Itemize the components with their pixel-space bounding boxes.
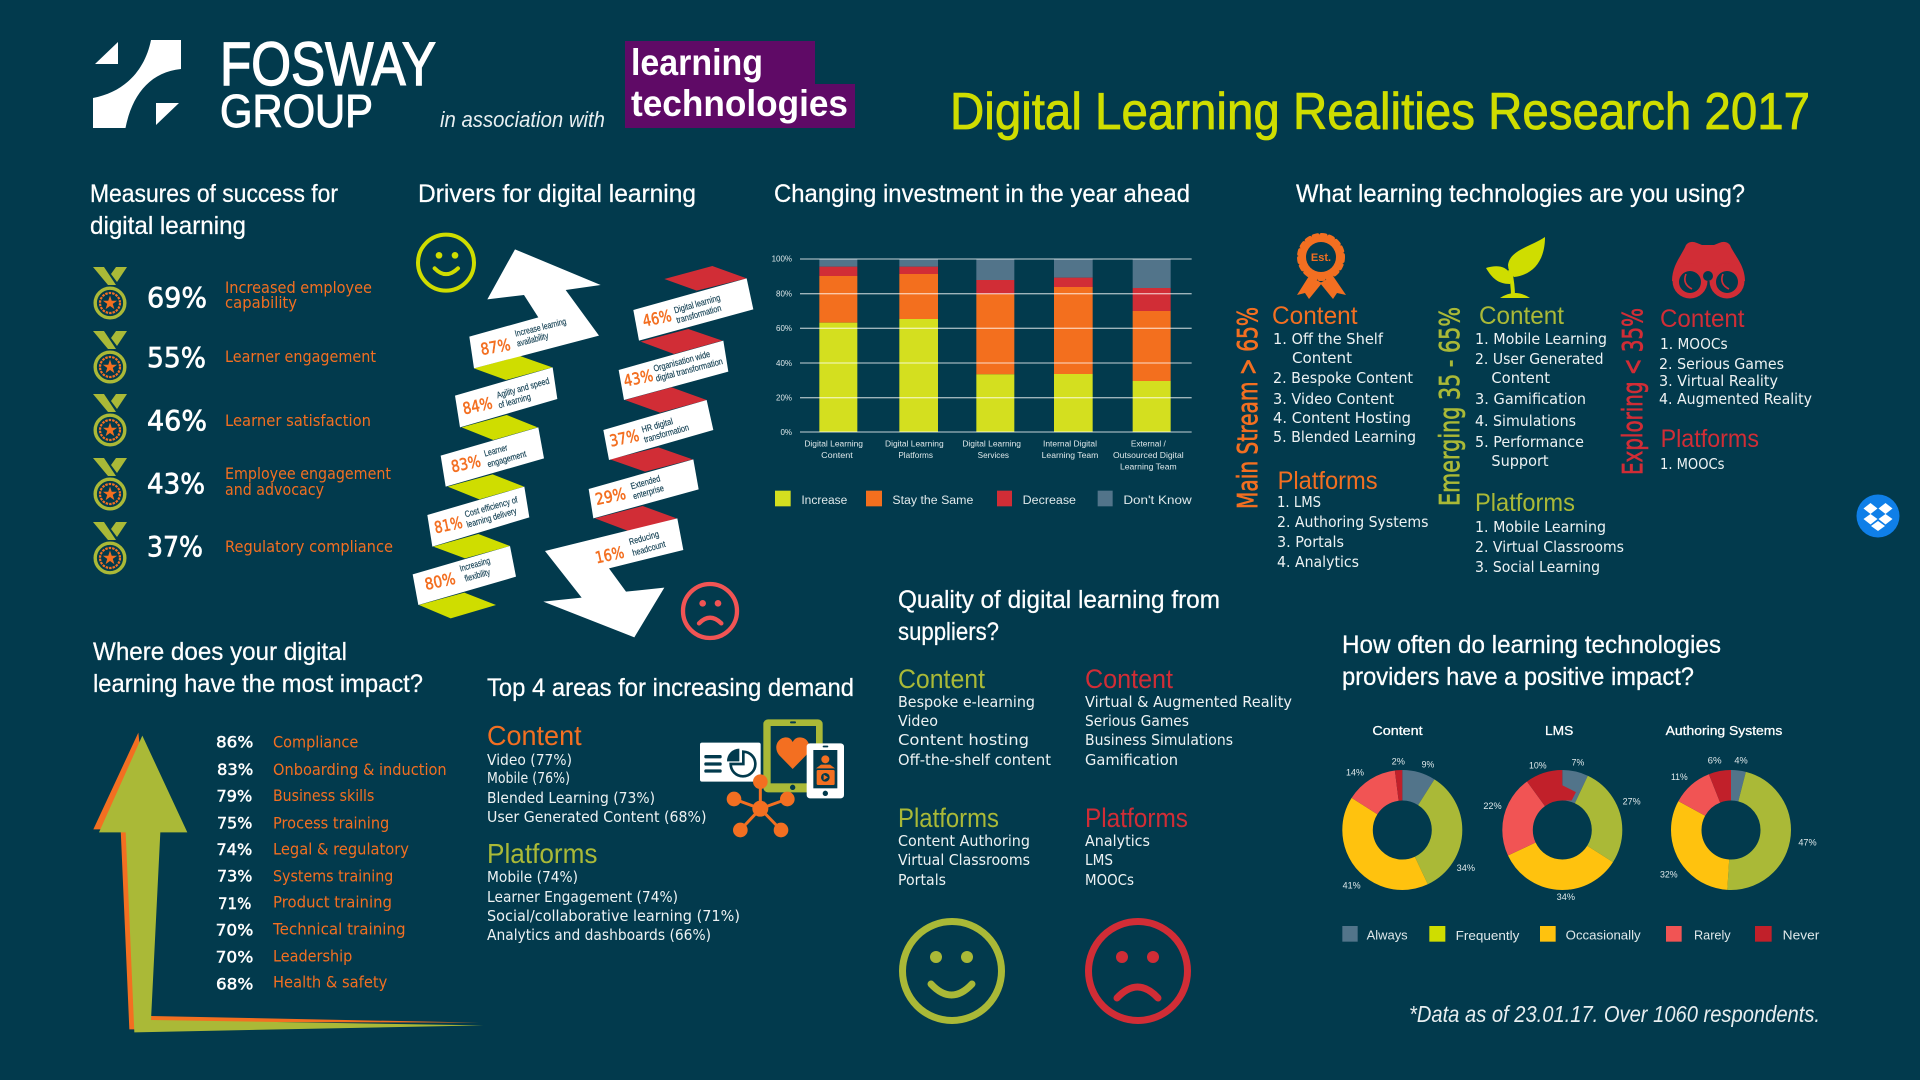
ribbon: positive drivers: 83%	[449, 451, 483, 476]
list: good content: Content hosting	[898, 731, 1029, 749]
list: poor platforms: MOOCs	[1085, 871, 1134, 889]
heading: impact	[93, 638, 423, 698]
legend: donuts: Never	[1783, 927, 1820, 942]
measure: 55%: 55%	[147, 341, 206, 374]
list: impact percentages: 75%	[217, 813, 252, 832]
category labels: Digital Learning	[804, 439, 863, 449]
icon: binoculars	[1672, 242, 1745, 298]
ribbon: positive drivers: Increase learning	[514, 316, 567, 339]
list: impact percentages: 70%	[216, 921, 253, 940]
measure: 43%: 43%	[147, 467, 205, 500]
heading: investment: Changing investment in the year ahead	[774, 180, 1190, 208]
list: demand platforms: Social/collaborative learning (71%)	[487, 907, 740, 925]
list: impact percentages: 79%	[216, 787, 252, 806]
bars	[800, 259, 1192, 432]
list: impact labels: Legal & regulatory	[273, 839, 409, 858]
list: exploring content: 1. MOOCs	[1660, 335, 1728, 353]
donut titles and values: 7%	[1572, 757, 1584, 767]
measure: 69%: capability	[225, 293, 297, 312]
list: emerging platforms	[1475, 489, 1624, 576]
ribbon: negative drivers: 43%	[622, 366, 655, 391]
donut titles and values: 32%	[1660, 870, 1678, 880]
donut titles and values: 14%	[1346, 768, 1364, 778]
donut titles and values: Content	[1372, 724, 1423, 738]
list: demand platforms: Analytics and dashboards (66%)	[487, 926, 711, 944]
list: demand content: User Generated Content (68%)	[487, 808, 706, 826]
ribbon: positive drivers: engagement	[486, 449, 528, 469]
vertical label: emerging: Emerging 35 - 65%	[1433, 307, 1466, 506]
list: impact labels: Onboarding & induction	[273, 760, 447, 779]
measure: 55%: Learner engagement	[225, 347, 376, 366]
category labels: Content	[821, 450, 854, 460]
logo: Fosway Group: FOSWAY	[220, 30, 436, 98]
list: main stream platforms: Platforms	[1278, 467, 1378, 495]
chart: stacked bars investment	[772, 255, 1192, 507]
list: good platforms: Platforms	[898, 803, 999, 833]
panel: measures of success	[90, 180, 393, 573]
measure: 46%	[93, 394, 371, 445]
donut titles and values: 22%	[1483, 801, 1502, 811]
measure: 43%: Employee engagement	[225, 464, 391, 483]
ribbon: positive drivers	[413, 249, 601, 618]
legend: donuts: Frequently	[1456, 928, 1520, 943]
measure: 37%: 37%	[147, 530, 203, 563]
axis labels: 100%	[772, 255, 792, 264]
ribbon: negative drivers: Reducing	[628, 529, 660, 547]
list: main stream content: 2. Bespoke Content	[1273, 369, 1413, 387]
ribbon: positive drivers: of learning	[497, 391, 532, 410]
ribbon: negative drivers: 16%	[594, 543, 626, 567]
list: poor platforms: Platforms	[1085, 803, 1188, 833]
category labels	[804, 439, 1184, 471]
list: emerging platforms: 2. Virtual Classrooms	[1475, 538, 1624, 556]
logo: Fosway Group	[93, 30, 436, 137]
list: main stream content	[1272, 302, 1416, 446]
donut titles and values: 34%	[1457, 863, 1475, 873]
donut titles and values: Authoring Systems	[1666, 724, 1782, 738]
heading: impact: Where does your digital	[93, 638, 347, 666]
heading: positive impact: providers have a positive impact?	[1342, 663, 1694, 691]
list: impact labels: Technical training	[272, 919, 406, 938]
measure: 37%: Regulatory compliance	[225, 537, 393, 556]
legend: donuts: Always	[1367, 927, 1408, 942]
list: poor platforms	[1085, 803, 1188, 889]
icon: rosette: Est.	[1311, 252, 1331, 264]
list: impact percentages: 74%	[216, 840, 252, 859]
measure: 55%	[93, 331, 376, 382]
category labels: Digital Learning	[885, 439, 944, 449]
list: good content: Content	[898, 664, 985, 694]
measure: 69%: 69%	[147, 281, 207, 314]
measure: 69%	[93, 267, 372, 318]
donut titles and values: 6%	[1708, 755, 1722, 765]
ribbon: negative drivers: transformation	[643, 422, 690, 445]
legend: donuts: Rarely	[1694, 927, 1731, 942]
list: impact percentages: 83%	[217, 760, 253, 779]
heading: quality	[898, 586, 1220, 646]
axis labels: 20%	[776, 394, 792, 403]
list: impact percentages: 73%	[217, 867, 252, 886]
list: exploring content: 4. Augmented Reality	[1659, 390, 1812, 408]
heading: positive impact	[1342, 631, 1721, 691]
heading: impact: learning have the most impact?	[93, 670, 423, 698]
heading: measures: Measures of success for	[90, 180, 338, 208]
list: good content: Video	[898, 712, 938, 730]
ribbon: negative drivers: transformation	[675, 303, 722, 325]
list: poor platforms: LMS	[1085, 851, 1113, 869]
heading: technologies: What learning technologies are you using?	[1296, 180, 1745, 208]
list: emerging platforms: Platforms	[1475, 489, 1575, 517]
logo: learning technologies	[625, 41, 855, 128]
list: main stream content: 4. Content Hosting	[1273, 409, 1411, 427]
panel: drivers ribbons	[413, 235, 753, 638]
list: poor content: Virtual & Augmented Reality	[1085, 693, 1292, 711]
list: emerging platforms: 1. Mobile Learning	[1475, 518, 1606, 536]
panel: emerging	[1433, 237, 1624, 576]
list: main stream platforms	[1277, 467, 1429, 571]
list: impact labels: Business skills	[273, 786, 374, 805]
list: poor content: Content	[1085, 664, 1173, 694]
heading: quality: Quality of digital learning from	[898, 586, 1220, 614]
list: impact labels: Product training	[273, 893, 392, 912]
axis labels: 80%	[776, 290, 792, 299]
list: exploring content: 3. Virtual Reality	[1659, 372, 1778, 390]
measure: 46%: 46%	[147, 404, 207, 437]
list: good platforms: Portals	[898, 871, 946, 889]
list: exploring content: Content	[1660, 305, 1745, 333]
donut: content	[1358, 785, 1447, 875]
list: demand content: Video (77%)	[487, 751, 572, 769]
list: demand content: Content	[487, 720, 582, 751]
icon: dropbox badge	[1856, 494, 1900, 538]
legend: donuts	[1342, 926, 1820, 943]
panel: top 4 demand	[487, 674, 854, 944]
list: good content: Bespoke e-learning	[898, 693, 1035, 711]
ribbon: negative drivers: 37%	[608, 426, 641, 451]
ribbon: negative drivers: Extended	[629, 473, 661, 491]
panel: main stream	[1231, 235, 1429, 571]
list: demand content: Blended Learning (73%)	[487, 789, 655, 807]
ribbon: positive drivers: flexibility	[463, 567, 492, 584]
heading: measures	[90, 180, 338, 240]
list: poor platforms: Analytics	[1085, 832, 1150, 850]
list: demand content: Mobile (76%)	[487, 769, 570, 787]
vertical label: main stream: Main Stream > 65%	[1231, 307, 1264, 509]
panel: impact	[93, 638, 483, 1032]
legend: Decrease	[1023, 493, 1076, 507]
heading: quality: suppliers?	[898, 618, 999, 646]
ribbon: positive drivers: 80%	[423, 569, 457, 594]
ribbon: positive drivers: Learner	[483, 442, 509, 459]
donut titles and values: 4%	[1734, 755, 1748, 765]
list: impact labels: Health & safety	[273, 973, 387, 992]
list: impact labels: Compliance	[273, 733, 358, 752]
list: exploring platforms	[1660, 425, 1759, 473]
list: impact percentages	[216, 733, 253, 993]
list: emerging content: 3. Gamification	[1475, 390, 1586, 408]
icon: sad face	[683, 584, 737, 638]
list: demand platforms: Platforms	[487, 838, 598, 869]
list: impact percentages: 68%	[216, 974, 253, 993]
list: main stream content: 1. Off the Shelf	[1273, 330, 1384, 348]
list: exploring content	[1659, 305, 1812, 408]
donut titles and values: 27%	[1623, 796, 1641, 806]
association text: in association with	[440, 107, 605, 132]
heading: measures: digital learning	[90, 212, 246, 240]
list: impact labels: Leadership	[273, 947, 352, 966]
donut titles and values: 11%	[1671, 772, 1688, 782]
measure: 43%: and advocacy	[225, 480, 324, 499]
list: main stream content: 5. Blended Learning	[1273, 428, 1416, 446]
category labels: External /	[1131, 439, 1167, 449]
list: main stream platforms: 3. Portals	[1277, 533, 1344, 551]
category labels: Internal Digital	[1043, 439, 1097, 449]
category labels: Outsourced Digital	[1113, 450, 1184, 460]
measure: 37%	[93, 522, 393, 573]
measure: 43%	[93, 458, 391, 509]
ribbon: negative drivers	[543, 266, 753, 637]
heading: positive impact: How often do learning technologies	[1342, 631, 1721, 659]
list: emerging content: Content	[1491, 369, 1550, 387]
list: impact percentages: 86%	[216, 733, 253, 752]
axis labels: 0%	[780, 428, 792, 437]
icon: rosette	[1297, 235, 1346, 299]
list: main stream content: Content	[1272, 302, 1358, 330]
ribbon: positive drivers: Agility and speed	[495, 376, 550, 400]
list: poor content	[1085, 664, 1292, 769]
ribbon: positive drivers: 84%	[461, 393, 494, 418]
icon: plant	[1486, 237, 1545, 298]
logo: Fosway Group: GROUP	[220, 85, 373, 137]
footnote: *Data as of 23.01.17. Over 1060 respondents.	[1409, 1001, 1820, 1027]
list: demand content	[487, 720, 706, 826]
list: emerging content: Support	[1491, 452, 1549, 470]
vertical label: exploring: Exploring < 35%	[1616, 308, 1649, 475]
list: demand platforms: Mobile (74%)	[487, 868, 578, 886]
ribbon: negative drivers: digital transformation	[655, 356, 724, 384]
list: exploring content: 2. Serious Games	[1659, 355, 1784, 373]
ribbon: negative drivers: enterprise	[632, 483, 665, 501]
axis labels: 60%	[776, 324, 792, 333]
list: impact percentages: 71%	[218, 894, 251, 913]
heading: demand: Top 4 areas for increasing demand	[487, 674, 854, 702]
donut titles and values: 2%	[1392, 756, 1405, 766]
ribbon: positive drivers: 87%	[479, 335, 512, 359]
ribbon: negative drivers: 46%	[641, 306, 673, 331]
list: main stream content: 3. Video Content	[1273, 390, 1394, 408]
list: impact labels: Process training	[273, 813, 389, 832]
donut titles and values: 41%	[1343, 880, 1361, 890]
ribbon: positive drivers: Increasing	[458, 555, 491, 574]
axis labels	[772, 255, 792, 437]
list: emerging content: 2. User Generated	[1475, 350, 1604, 368]
list: emerging content: 4. Simulations	[1475, 412, 1576, 430]
list: main stream content: Content	[1292, 349, 1352, 367]
list: emerging content: 1. Mobile Learning	[1475, 330, 1607, 348]
list: demand platforms: Learner Engagement (74%)	[487, 888, 678, 906]
donut titles and values: 47%	[1798, 838, 1817, 848]
ribbon: negative drivers: Organisation wide	[652, 349, 711, 374]
donut titles and values: 9%	[1422, 760, 1434, 770]
measure: 69%: Increased employee	[225, 278, 372, 297]
list: main stream platforms: 2. Authoring Systems	[1277, 513, 1429, 531]
list: emerging content: Content	[1479, 302, 1564, 330]
list: emerging content: 5. Performance	[1475, 433, 1584, 451]
list: main stream platforms: 4. Analytics	[1277, 553, 1359, 571]
list: emerging platforms: 3. Social Learning	[1475, 558, 1600, 576]
heading: drivers: Drivers for digital learning	[418, 180, 696, 208]
legend	[775, 491, 1192, 507]
icon: devices cluster	[700, 719, 844, 837]
donut: authoring systems	[1686, 785, 1776, 875]
ribbon: negative drivers: headcount	[631, 539, 667, 558]
panel: positive impact donuts	[1342, 631, 1820, 943]
icon: large sad face	[1088, 922, 1188, 1020]
category labels: Services	[978, 450, 1009, 460]
ribbon: positive drivers: availability	[516, 330, 550, 349]
list: exploring platforms: 1. MOOCs	[1660, 455, 1725, 473]
list: poor content: Business Simulations	[1085, 731, 1233, 749]
ribbon: positive drivers: Cost efficiency of	[463, 494, 519, 519]
list: good content: Off-the-shelf content	[898, 751, 1051, 769]
list: poor content: Serious Games	[1085, 712, 1189, 730]
donut titles and values: 34%	[1557, 892, 1575, 902]
axis labels: 40%	[776, 359, 792, 368]
donut: LMS	[1518, 785, 1607, 875]
legend: donuts: Occasionally	[1566, 927, 1641, 942]
logo: learning technologies: technologies	[631, 83, 848, 124]
ribbon: negative drivers: HR digital	[640, 416, 674, 435]
panel: quality	[898, 586, 1292, 1020]
donut titles and values: 10%	[1529, 760, 1547, 770]
list: impact percentages: 70%	[216, 947, 253, 966]
list: impact labels	[272, 733, 447, 992]
list: good platforms: Virtual Classrooms	[898, 851, 1030, 869]
ribbon: negative drivers: Digital learning	[673, 293, 721, 315]
panel: exploring	[1616, 242, 1812, 475]
legend: Increase	[801, 493, 848, 507]
category labels: Platforms	[898, 450, 933, 460]
category labels: Learning Team	[1120, 461, 1177, 471]
list: emerging content	[1475, 302, 1607, 470]
list: good content	[898, 664, 1051, 769]
arrow: impact	[93, 733, 483, 1032]
list: good platforms	[898, 803, 1030, 889]
list: demand platforms	[487, 838, 740, 944]
category labels: Digital Learning	[962, 439, 1021, 449]
icon: smiley	[418, 235, 474, 291]
list: poor content: Gamification	[1085, 751, 1178, 769]
ribbon: positive drivers: 81%	[433, 513, 464, 537]
ribbon: positive drivers: learning delivery	[465, 506, 518, 530]
category labels: Learning Team	[1042, 450, 1098, 460]
donut titles and values: LMS	[1545, 724, 1573, 738]
list: impact labels: Systems training	[273, 867, 393, 886]
donut titles and values	[1343, 724, 1817, 902]
list: main stream platforms: 1. LMS	[1277, 493, 1321, 511]
legend: Don't Know	[1123, 493, 1192, 507]
ribbon: negative drivers: 29%	[594, 484, 627, 509]
list: good platforms: Content Authoring	[898, 832, 1030, 850]
legend: Stay the Same	[892, 493, 974, 507]
icon: large smile	[902, 922, 1002, 1020]
list: exploring platforms: Platforms	[1661, 425, 1759, 453]
title: Digital Learning Realities Research 2017	[950, 83, 1810, 141]
measure: 46%: Learner satisfaction	[225, 411, 371, 430]
logo: learning technologies: learning	[631, 42, 763, 83]
